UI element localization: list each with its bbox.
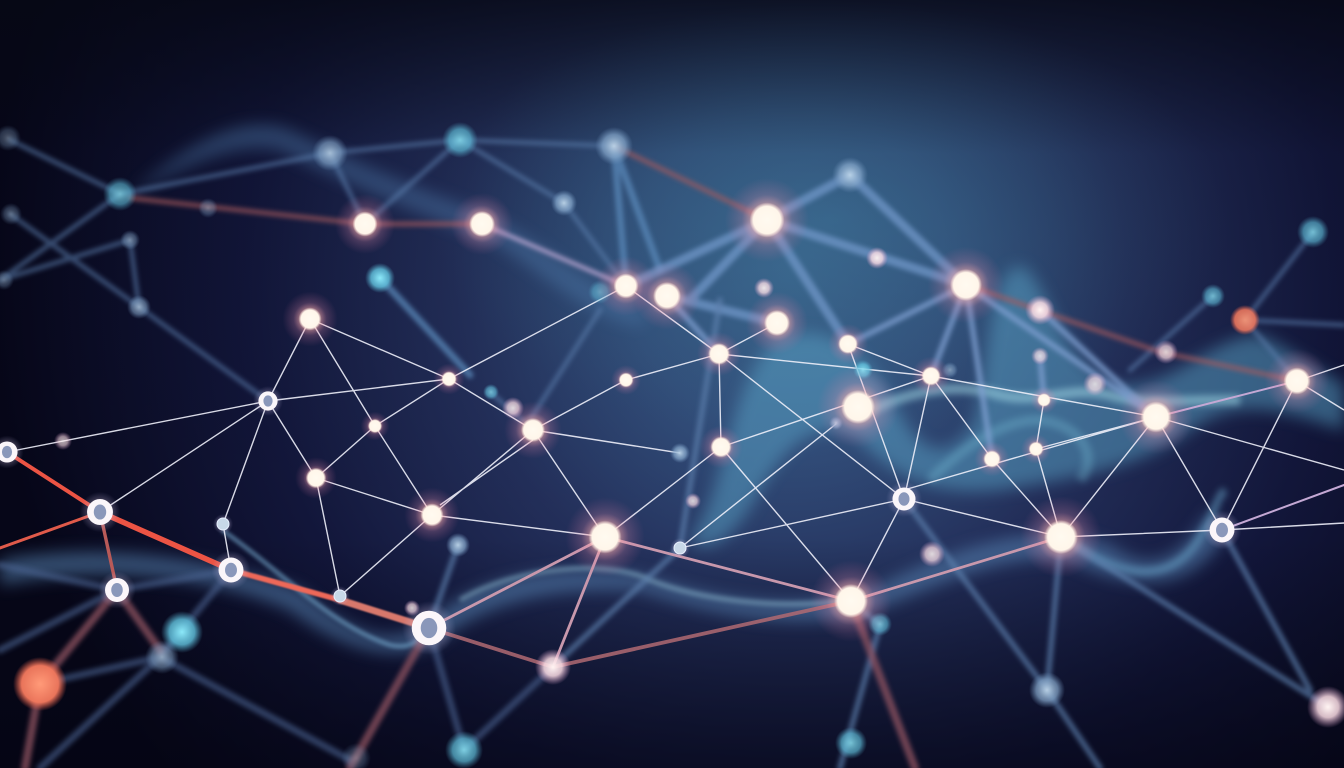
pink connection lines bbox=[429, 381, 1344, 667]
sharp white connection lines bbox=[7, 286, 1344, 601]
glowing warm nodes bbox=[282, 178, 1329, 642]
wave ribbons bbox=[0, 125, 1344, 652]
red highlighted path bbox=[0, 452, 429, 628]
ring nodes bbox=[0, 386, 1242, 655]
small bright nodes bbox=[295, 324, 1058, 499]
